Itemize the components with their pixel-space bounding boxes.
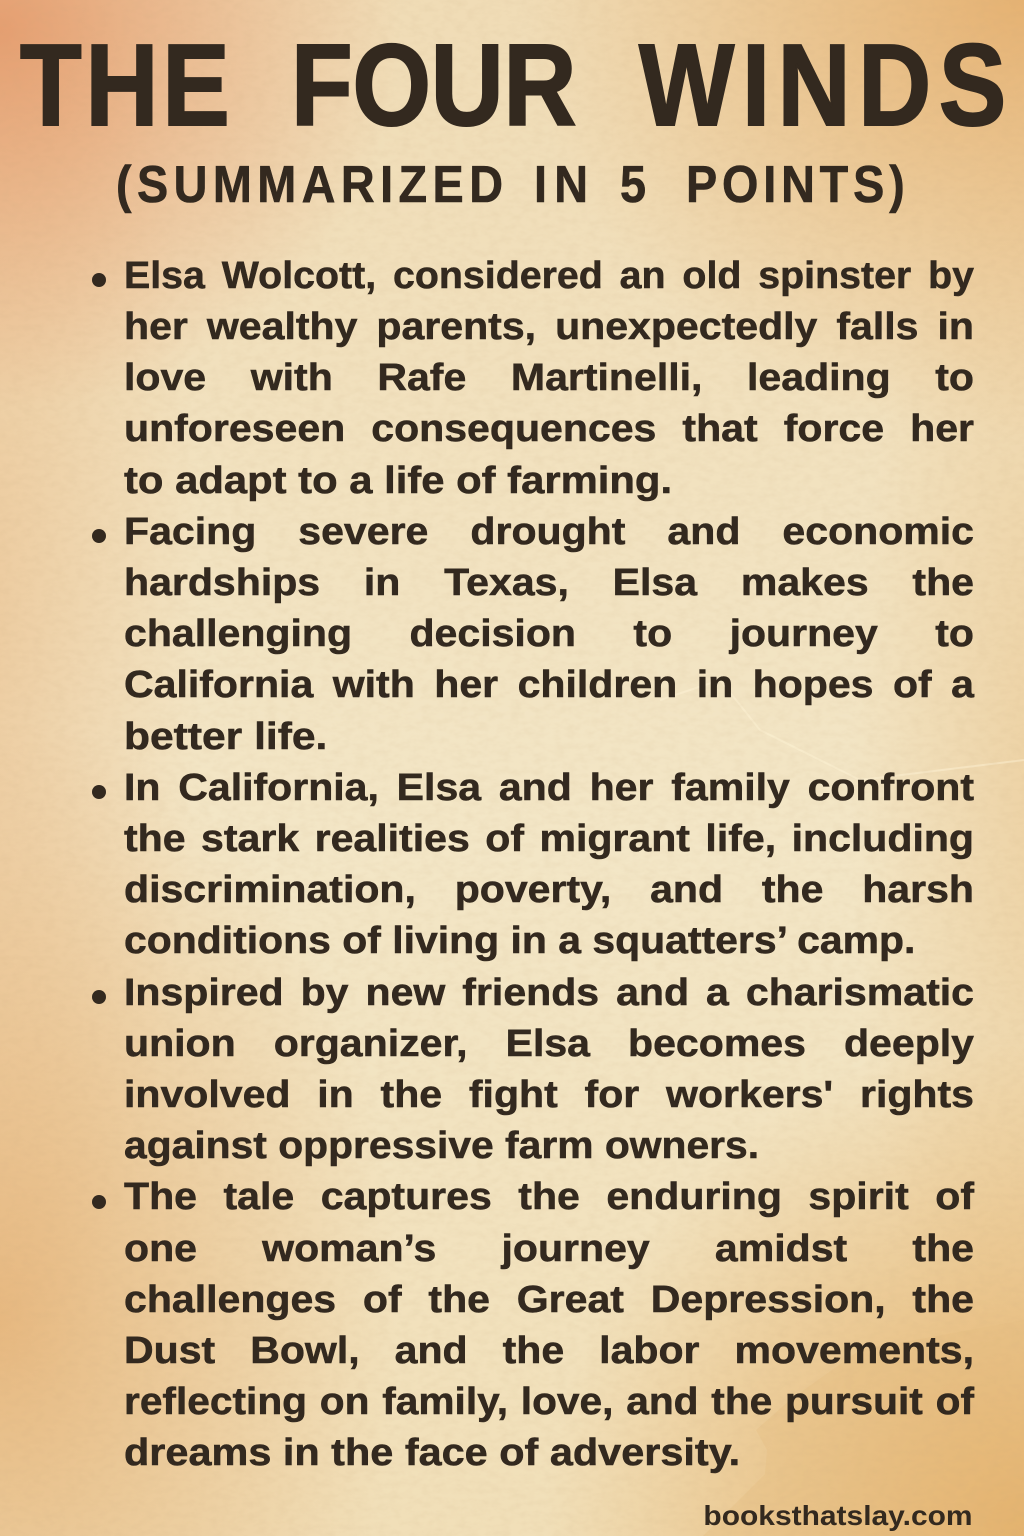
- bullet point 4: against oppressive farm owners.: [124, 1125, 759, 1167]
- main heading: FOUR: [291, 22, 576, 151]
- bullet point 2: [92, 511, 974, 758]
- bullet point 4: union organizer, Elsa becomes deeply: [124, 1023, 974, 1065]
- bullet point 1: unforeseen consequences that force her: [124, 408, 974, 450]
- bullet point 1: love with Rafe Martinelli, leading to: [124, 357, 974, 399]
- bullet point 5: Dust Bowl, and the labor movements,: [124, 1330, 974, 1372]
- subtitle: IN: [534, 156, 588, 214]
- subtitle: (SUMMARIZED: [116, 156, 503, 214]
- bullet point 2: California with her children in hopes of a: [124, 664, 974, 706]
- bullet point 3: the stark realities of migrant life, including: [124, 818, 974, 860]
- bullet point 1: her wealthy parents, unexpectedly falls in: [124, 306, 974, 348]
- subtitle: [116, 156, 905, 214]
- bullet point 3: conditions of living in a squatters’ camp.: [124, 920, 915, 962]
- bullet point 1: Elsa Wolcott, considered an old spinster by: [124, 255, 974, 297]
- main heading: THE: [20, 22, 230, 151]
- main heading: [20, 22, 1006, 151]
- bullet point 5: dreams in the face of adversity.: [124, 1432, 740, 1474]
- bullet point 3: [92, 767, 974, 962]
- bullet point 5: one woman’s journey amidst the: [124, 1228, 974, 1270]
- bullet point 5: [92, 1176, 974, 1474]
- bullet point 5: The tale captures the enduring spirit of: [124, 1176, 974, 1218]
- bullet point 4: Inspired by new friends and a charismatic: [124, 972, 974, 1014]
- bullet point 4: involved in the fight for workers' rights: [124, 1074, 974, 1116]
- website credit: booksthatslay.com: [704, 1500, 973, 1531]
- bullet point 4: [92, 972, 974, 1167]
- title: [20, 22, 1006, 214]
- bullet point 3: In California, Elsa and her family confront: [124, 767, 974, 809]
- bullet point 5: reflecting on family, love, and the pursuit of: [124, 1381, 974, 1423]
- subtitle: 5: [620, 156, 646, 214]
- bullet point 1: to adapt to a life of farming.: [124, 460, 672, 502]
- main heading: WINDS: [639, 22, 1006, 151]
- subtitle: POINTS): [686, 156, 905, 214]
- bullet point 2: challenging decision to journey to: [124, 613, 974, 655]
- bullet point 3: discrimination, poverty, and the harsh: [124, 869, 974, 911]
- bullet point 2: better life.: [124, 716, 327, 758]
- bullet point 1: [92, 255, 974, 502]
- bullet point 2: Facing severe drought and economic: [124, 511, 974, 553]
- bullet point 2: hardships in Texas, Elsa makes the: [124, 562, 974, 604]
- bullet point 5: challenges of the Great Depression, the: [124, 1279, 974, 1321]
